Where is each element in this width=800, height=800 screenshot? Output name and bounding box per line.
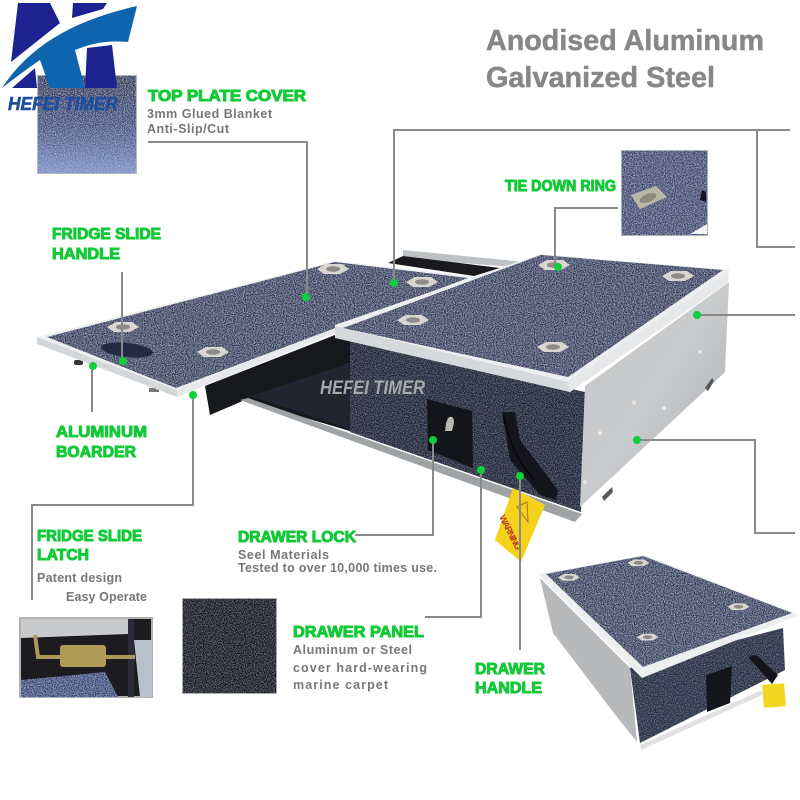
small product view [538, 555, 799, 750]
aluminum boarder label: ALUMINUM [56, 424, 147, 441]
drawer lock label: DRAWER LOCK [238, 529, 356, 546]
small side panel [540, 578, 637, 742]
warning label [495, 488, 545, 562]
bottom rail [240, 398, 582, 522]
title: Anodised Aluminum [486, 25, 764, 57]
top plate cover label: TOP PLATE COVER [148, 88, 306, 105]
watermark: HEFEI TIMER [320, 378, 425, 399]
fridge slide latch label [37, 528, 147, 604]
drawer lock label: Tested to over 10,000 times use. [238, 561, 437, 575]
fridge slide latch label: LATCH [37, 547, 89, 564]
drawer lock label [238, 529, 437, 575]
warning label: WARNING [497, 513, 523, 552]
drawer panel label: cover hard-wearing [293, 661, 427, 675]
fridge slide latch label: FRIDGE SLIDE [37, 528, 142, 545]
small handle [748, 655, 778, 684]
drawer handle strap [502, 412, 558, 500]
back rail [388, 250, 525, 276]
drawer lock plate [427, 399, 473, 468]
aluminum boarder label: BOARDER [56, 444, 136, 461]
photo: latch [20, 618, 152, 697]
drawer panel label: Aluminum or Steel [293, 643, 412, 657]
drawer handle label: DRAWER [475, 661, 545, 678]
side panel bolts [583, 350, 702, 484]
top plate cover label: Anti-Slip/Cut [147, 122, 230, 136]
drawer handle label: HANDLE [475, 680, 542, 697]
drawer top rings [397, 260, 694, 352]
top plate cover label: 3mm Glued Blanket [147, 107, 273, 121]
small top frame [538, 555, 799, 678]
small lock [706, 666, 732, 712]
slide plate rings [107, 264, 438, 357]
small drawer front [630, 628, 785, 743]
small top carpet [546, 556, 792, 667]
leader lines [32, 130, 795, 650]
fridge slide latch label: Easy Operate [66, 590, 147, 604]
drawer underside dark slide [205, 335, 353, 432]
photo: tie down ring [621, 150, 708, 236]
fridge slide latch label: Patent design [37, 571, 122, 585]
drawer handle label [475, 661, 545, 697]
logo wordmark: HEFEI TIMER [8, 94, 118, 114]
tie down ring label: TIE DOWN RING [505, 178, 616, 195]
drawer front carpet [350, 340, 585, 512]
fridge slide handle label: HANDLE [52, 246, 120, 263]
fridge slide handle recess [100, 340, 154, 360]
small bottom rail [640, 690, 764, 750]
aluminum boarder label [56, 424, 147, 461]
main product: fridge slide and drawer [37, 250, 729, 562]
fridge slide handle label [52, 226, 161, 263]
drawer top carpet [343, 255, 723, 377]
drawer panel label: DRAWER PANEL [293, 624, 424, 641]
fridge slide handle label: FRIDGE SLIDE [52, 226, 161, 243]
slide plate frame [37, 261, 477, 397]
photo: carpet sample [37, 75, 137, 174]
drawer lock label: Seel Materials [238, 548, 329, 562]
title [486, 25, 764, 94]
logo: Hefei Timer [2, 3, 137, 88]
photo: black leather carpet sample [182, 598, 277, 694]
small warning label [762, 683, 786, 708]
small rings [558, 559, 749, 641]
drawer panel label: marine carpet [293, 678, 389, 692]
top plate cover label [147, 88, 306, 136]
side aluminium panel [580, 282, 729, 507]
drawer top frame [335, 254, 729, 392]
green callout dots [89, 263, 701, 480]
slide plate carpet [47, 262, 468, 388]
drawer panel label [293, 624, 427, 692]
feet [74, 360, 714, 501]
title: Galvanized Steel [486, 62, 715, 94]
